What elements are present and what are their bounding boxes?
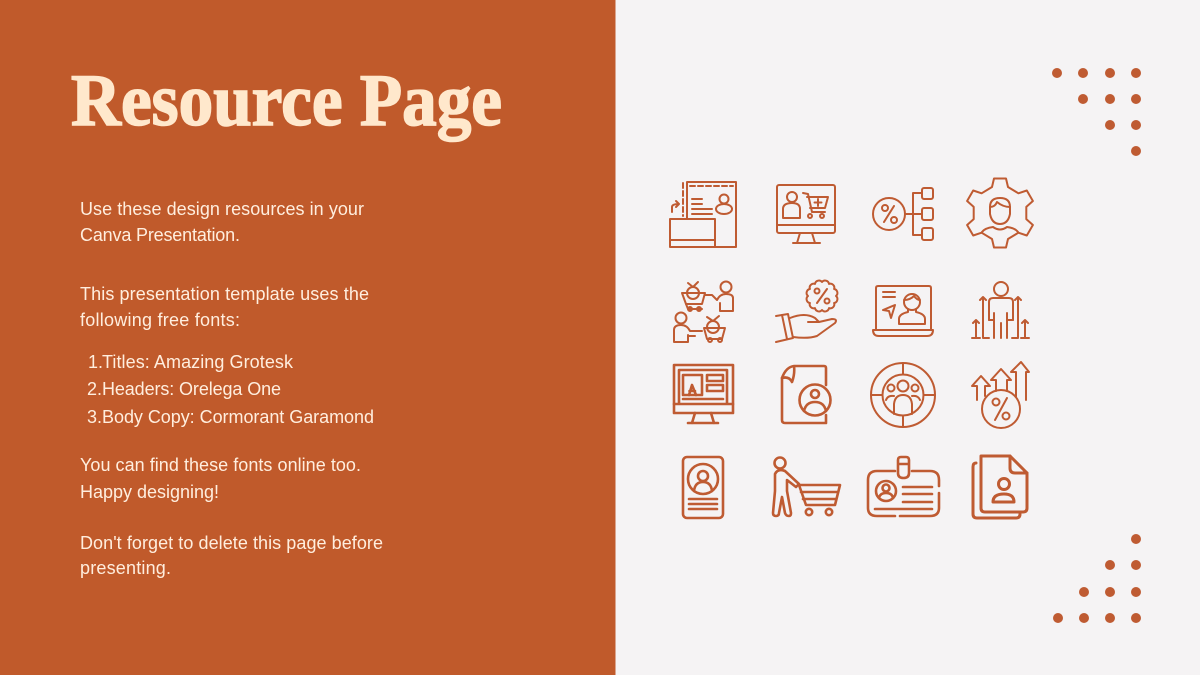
icon: percent with rising arrows (972, 362, 1029, 428)
icon: document with profile (782, 366, 830, 423)
text block: find fonts (80, 455, 361, 502)
icon: id badge (868, 457, 939, 516)
text block: intro: Use these design resources in your (80, 199, 364, 219)
text block: font list: Body Copy: Cormorant Garamond (102, 407, 374, 427)
icon: person with growth arrows (972, 282, 1029, 338)
icon: percent hierarchy (873, 188, 933, 240)
text block: font list: Headers: Orelega One (102, 379, 281, 399)
text block: font list: 2. (87, 379, 102, 399)
text block: font list (87, 352, 374, 427)
icon: stacked documents with profile (973, 456, 1027, 518)
text block: fonts intro: following free fonts: (80, 310, 240, 330)
text block: intro: Canva Presentation. (80, 225, 240, 245)
panel: left orange (0, 0, 616, 675)
text block: find fonts: Happy designing! (80, 482, 219, 502)
icon: target group (871, 363, 935, 427)
icon: profile card (683, 457, 723, 518)
icon: shoppers exchanging carts (674, 282, 733, 342)
text block: font list: 1. (88, 352, 103, 372)
icon: man pushing cart (773, 458, 840, 516)
text block: fonts intro (80, 284, 369, 330)
dots: top right (1052, 68, 1141, 156)
icon: gear with person (967, 178, 1033, 248)
icon: laptop with person (873, 286, 933, 336)
icon: desktop profile (674, 365, 733, 423)
text block: delete reminder: presenting. (80, 558, 171, 578)
text block: fonts intro: This presentation template uses the (80, 284, 369, 304)
icon: hand with discount badge (776, 281, 837, 342)
title: Resource Page (71, 60, 502, 142)
dots: bottom right (1053, 534, 1141, 623)
icon: reception desk (670, 182, 736, 247)
text block: delete reminder (80, 533, 383, 578)
text block: font list: 3. (87, 407, 102, 427)
icon: monitor with cart (777, 185, 835, 243)
text block: intro (80, 199, 364, 245)
text block: find fonts: You can find these fonts online too. (80, 455, 361, 475)
text block: delete reminder: Don't forget to delete this page before (80, 533, 383, 553)
text block: font list: Titles: Amazing Grotesk (102, 352, 294, 372)
